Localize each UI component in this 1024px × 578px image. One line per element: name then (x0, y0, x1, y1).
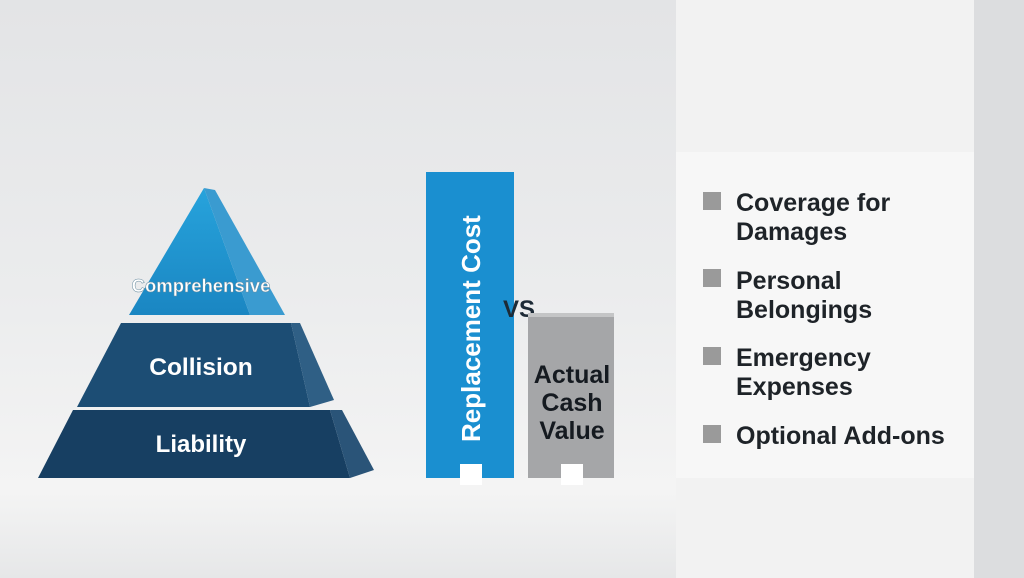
item: personal belongings: Personal (736, 267, 842, 295)
item: personal belongings: Belongings (736, 296, 872, 324)
item: coverage for damages (703, 189, 890, 246)
bar: replacement cost: Replacement Cost (456, 215, 486, 442)
bar: actual cash value: Cash (541, 389, 603, 417)
tier: liability: Liability (156, 431, 247, 458)
item: optional add-ons: Optional Add-ons (736, 422, 945, 450)
bar: actual cash value: Actual (534, 361, 610, 389)
bar: actual cash value (528, 313, 614, 485)
tier: liability (38, 410, 374, 478)
tier: collision: Collision (149, 354, 253, 381)
item: personal belongings (703, 267, 872, 324)
tier: comprehensive: Comprehensive (132, 275, 270, 296)
vs label: VS (503, 296, 535, 323)
tier: collision (77, 323, 334, 407)
item: emergency expenses (703, 344, 871, 401)
item: emergency expenses: Emergency (736, 344, 871, 372)
pyramid (38, 188, 374, 478)
panel: features list (676, 152, 974, 478)
bar: replacement cost (426, 172, 514, 485)
tier: comprehensive (129, 188, 285, 315)
bar: actual cash value: Value (539, 417, 605, 445)
item: coverage for damages: Damages (736, 218, 847, 246)
item: emergency expenses: Expenses (736, 373, 853, 401)
item: coverage for damages: Coverage for (736, 189, 890, 217)
